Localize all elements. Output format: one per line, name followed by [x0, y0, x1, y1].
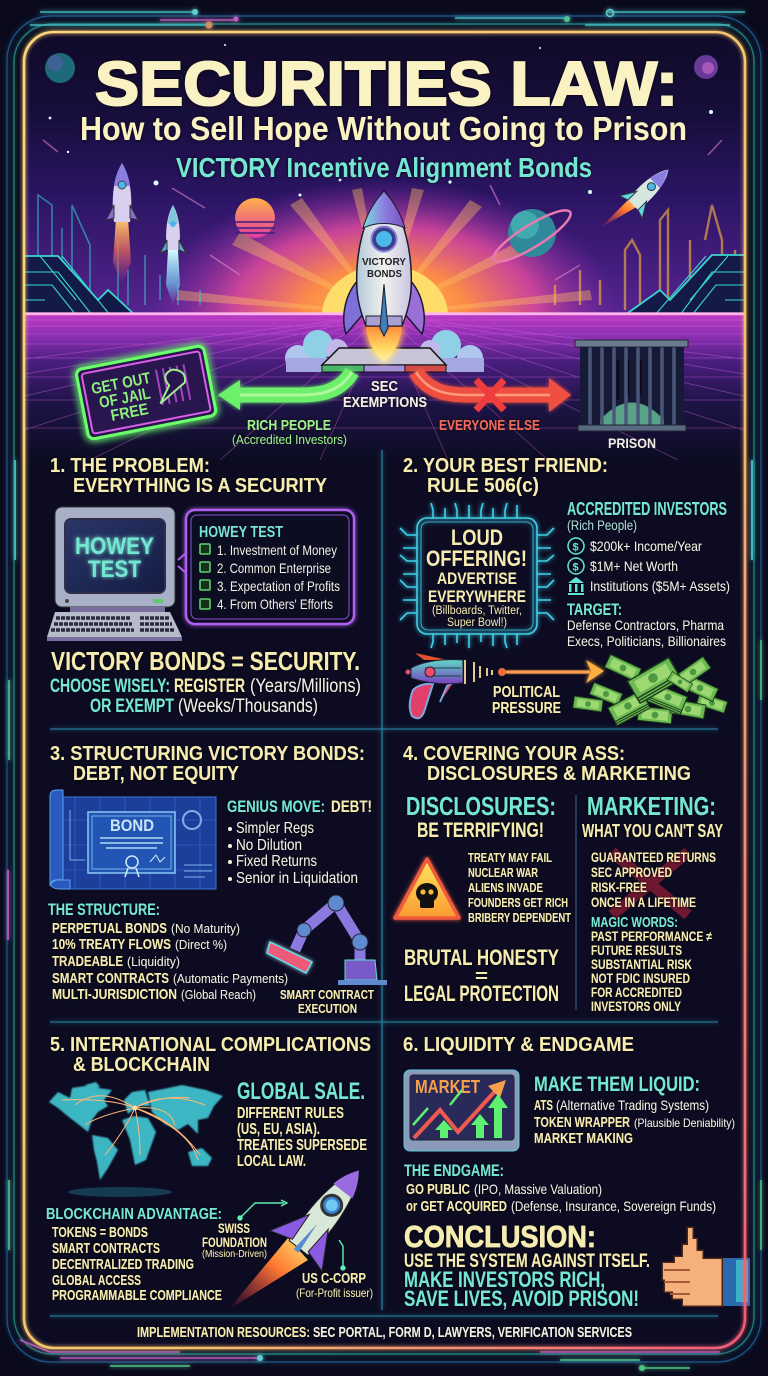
can't say list: SEC APPROVED [591, 865, 672, 880]
disclosure risks: FOUNDERS GET RICH [468, 895, 568, 910]
label: everyone else: EVERYONE ELSE [439, 417, 540, 434]
horizon line [24, 312, 745, 315]
panel 6: liquidity and endgame [403, 1034, 750, 1311]
disclosure risks: NUCLEAR WAR [468, 865, 538, 880]
brutal honesty: BRUTAL HONESTY [404, 945, 559, 970]
hero scene [0, 32, 768, 460]
brutal honesty: = [475, 966, 488, 986]
icon: dollar coin 2: $ [572, 562, 579, 574]
make them liquid: MAKE THEM LIQUID: [534, 1073, 700, 1096]
ticket: get out of jail free [76, 345, 217, 440]
world map [49, 1082, 223, 1197]
genius move list: GENIUS MOVE: [227, 797, 325, 816]
connector arrows [238, 1200, 345, 1270]
conclusion: MAKE INVESTORS RICH, [404, 1267, 605, 1292]
howey test checklist: 3. Expectation of Profits [217, 578, 340, 594]
blueprint bond: BOND [110, 816, 154, 835]
icon: red x [612, 852, 688, 915]
prison [575, 340, 688, 451]
heading 6: 6. LIQUIDITY & ENDGAME [403, 1034, 634, 1056]
chip: loud offering: LOUD [451, 525, 503, 550]
us c-corp: (For-Profit issuer) [296, 1286, 373, 1300]
ticket: get out of jail free: OF JAIL [98, 385, 152, 412]
blueprint bond [50, 790, 216, 889]
disclosures heading: DISCLOSURES: [406, 791, 556, 821]
heading 3: DEBT, NOT EQUITY [73, 763, 240, 785]
howey test checklist: 2. Common Enterprise [217, 560, 331, 576]
heading 2 [403, 455, 608, 497]
city right [555, 205, 735, 310]
label: political pressure: PRESSURE [492, 700, 561, 717]
city left [38, 195, 200, 305]
brutal honesty: LEGAL PROTECTION [404, 981, 559, 1006]
global sale text: TREATIES SUPERSEDE [237, 1137, 367, 1154]
icon: bank [568, 577, 584, 595]
howey test checklist: HOWEY TEST [199, 524, 283, 541]
the structure list: THE STRUCTURE: [48, 900, 160, 919]
icon: crt computer: HOWEY [75, 533, 154, 560]
magic words: FOR ACCREDITED [591, 985, 682, 1000]
verdict text: (Years/Millions) [250, 676, 361, 697]
disclosure risks: ALIENS INVADE [468, 880, 543, 895]
clouds [285, 330, 484, 372]
icon: dollar coin 2 [568, 558, 584, 574]
market monitor [404, 1070, 519, 1151]
make them liquid: (Alternative Trading Systems) [556, 1097, 709, 1113]
big sun [322, 270, 448, 312]
heading 1: EVERYTHING IS A SECURITY [73, 475, 328, 497]
panel 1: the problem [47, 455, 361, 717]
accredited investors: $1M+ Net Worth [590, 558, 678, 574]
the endgame: (Defense, Insurance, Sovereign Funds) [511, 1198, 716, 1214]
icon: crt computer: TEST [88, 556, 141, 583]
accredited investors: Defense Contractors, Pharma [567, 617, 724, 633]
subtitle: How to Sell Hope Without Going to Prison [80, 110, 687, 147]
red x [476, 380, 504, 410]
launch platform [322, 348, 446, 372]
accredited investors: (Rich People) [567, 517, 637, 533]
chip: loud offering: (Billboards, Twitter, [432, 605, 522, 617]
magic words [591, 914, 712, 1014]
sunburst glow [162, 183, 608, 312]
panel 2: rule 506(c) [400, 455, 730, 725]
label: political pressure: POLITICAL [493, 684, 560, 701]
chip: loud offering [400, 503, 554, 648]
blockchain advantage list: PROGRAMMABLE COMPLIANCE [52, 1287, 222, 1304]
magic words: PAST PERFORMANCE ≠ [591, 929, 712, 944]
red arrow [416, 372, 571, 412]
main rocket: VICTORY [362, 256, 406, 268]
pixel planet left [45, 53, 75, 83]
the endgame [404, 1161, 716, 1215]
accredited investors: $200k+ Income/Year [590, 538, 702, 554]
swiss foundation: SWISS [218, 1220, 250, 1236]
label: sec exemptions: SEC [371, 379, 398, 395]
howey test checklist [178, 510, 354, 624]
the structure list: PERPETUAL BONDS [52, 920, 167, 937]
blockchain advantage list: GLOBAL ACCESS [52, 1272, 141, 1289]
the structure list: TRADEABLE [52, 953, 123, 970]
blockchain advantage list: DECENTRALIZED TRADING [52, 1256, 194, 1273]
prison: PRISON [608, 435, 656, 451]
magic words: SUBSTANTIAL RISK [591, 957, 692, 972]
the structure list: SMART CONTRACTS [52, 970, 169, 987]
panel 5: international and blockchain [46, 1034, 385, 1310]
icon: robot arm [267, 895, 387, 985]
verdict text: (Weeks/Thousands) [178, 696, 318, 717]
the endgame: or GET ACQUIRED [406, 1199, 507, 1215]
streaks [43, 140, 722, 280]
global sale text: DIFFERENT RULES [237, 1105, 344, 1122]
make them liquid [534, 1073, 735, 1147]
main rocket [344, 191, 424, 362]
ticket: get out of jail free: GET OUT [90, 370, 152, 398]
mountains left [24, 256, 135, 315]
green arrow [218, 372, 352, 410]
howey test checklist: 4. From Others' Efforts [217, 596, 333, 612]
icon: dollar coin [568, 538, 584, 554]
make them liquid: (Plausible Deniability) [634, 1116, 735, 1130]
disclosures heading: BE TERRIFYING! [417, 819, 544, 842]
verdict text: CHOOSE WISELY: [50, 676, 170, 697]
icon: pile of money [573, 654, 728, 725]
heading 5: 5. INTERNATIONAL COMPLICATIONS [50, 1034, 371, 1056]
heading 3: 3. STRUCTURING VICTORY BONDS: [50, 743, 365, 765]
chip: loud offering: OFFERING! [426, 546, 527, 571]
conclusion: USE THE SYSTEM AGAINST ITSELF. [404, 1251, 650, 1272]
magic words: MAGIC WORDS: [591, 914, 678, 931]
disclosure risks: BRIBERY DEPENDENT [468, 910, 571, 925]
verdict text: VICTORY BONDS = SECURITY. [51, 646, 360, 676]
small rocket B [160, 205, 186, 305]
stars [49, 44, 713, 196]
marketing heading: MARKETING: [587, 791, 716, 821]
retro sun [235, 198, 275, 238]
icon: pixel thumbs up [662, 1227, 750, 1306]
genius move list: DEBT! [331, 797, 372, 816]
label: sec exemptions [343, 379, 427, 411]
swiss foundation: (Mission-Driven) [202, 1249, 267, 1260]
howey test checklist: 1. Investment of Money [217, 542, 337, 558]
chip: loud offering: ADVERTISE [437, 569, 517, 588]
panel 3: structuring victory bonds [48, 743, 387, 1016]
the endgame: GO PUBLIC [406, 1182, 470, 1198]
make them liquid: ATS [534, 1097, 553, 1114]
label: smart contract execution: EXECUTION [298, 1001, 357, 1016]
accredited investors: Institutions ($5M+ Assets) [590, 578, 730, 594]
conclusion [404, 1219, 650, 1311]
magic words: FUTURE RESULTS [591, 943, 682, 958]
the endgame: THE ENDGAME: [404, 1161, 504, 1180]
can't say list: ONCE IN A LIFETIME [591, 895, 696, 910]
chip: loud offering: Super Bowl!) [447, 617, 507, 629]
icon: warning skull [395, 859, 459, 918]
label: sec exemptions: EXEMPTIONS [343, 395, 427, 411]
heading 1: 1. THE PROBLEM: [50, 455, 210, 477]
accredited investors: Execs, Politicians, Billionaires [567, 633, 726, 649]
the structure list: (Direct %) [175, 937, 227, 952]
heading 5: & BLOCKCHAIN [73, 1054, 210, 1076]
can't say list [591, 850, 716, 910]
global sale text [237, 1078, 367, 1170]
heading 4: 4. COVERING YOUR ASS: [403, 743, 625, 765]
genius move list [227, 797, 372, 887]
blockchain advantage list: BLOCKCHAIN ADVANTAGE: [46, 1206, 222, 1223]
verdict text: REGISTER [174, 676, 245, 697]
genius move list: No Dilution [236, 837, 302, 854]
market monitor: MARKET [415, 1077, 480, 1097]
panel 4: covering your ass [395, 743, 723, 1014]
genius move list: Fixed Returns [236, 853, 317, 870]
verdict text: OR EXEMPT [90, 696, 174, 717]
ringed planet [492, 209, 572, 263]
global sale text: GLOBAL SALE. [237, 1078, 365, 1105]
disclosures heading [406, 791, 556, 842]
the structure list: (No Maturity) [171, 921, 240, 936]
grid floor [0, 315, 768, 460]
magic words: INVESTORS ONLY [591, 999, 681, 1014]
footer resources: SEC PORTAL, FORM D, LAWYERS, VERIFICATION SERVICES [313, 1324, 632, 1341]
global sale text: (US, EU, ASIA). [237, 1121, 320, 1138]
footer resources [137, 1324, 632, 1341]
conclusion: CONCLUSION: [404, 1219, 596, 1254]
tilted rocket [602, 170, 668, 227]
magic words: NOT FDIC INSURED [591, 971, 690, 986]
can't say list: GUARANTEED RETURNS [591, 850, 716, 865]
disclosure risks [468, 850, 571, 925]
can't say list: RISK-FREE [591, 880, 647, 895]
the structure list [48, 900, 288, 1003]
icon: dollar coin: $ [572, 542, 579, 554]
blockchain advantage list: SMART CONTRACTS [52, 1240, 160, 1257]
main rocket: BONDS [367, 268, 402, 280]
tagline: VICTORY Incentive Alignment Bonds [176, 152, 592, 183]
heading 2: 2. YOUR BEST FRIEND: [403, 455, 608, 477]
icon: crt computer [47, 507, 182, 641]
mountains right [625, 255, 745, 315]
label: smart contract execution: SMART CONTRACT [280, 987, 374, 1002]
title [80, 50, 687, 183]
footer resources: IMPLEMENTATION RESOURCES: [137, 1324, 310, 1341]
us c-corp: US C-CORP [302, 1270, 366, 1287]
accredited investors [567, 499, 730, 649]
marketing heading [582, 791, 723, 841]
the structure list: (Automatic Payments) [173, 971, 288, 986]
small rocket A [106, 163, 138, 285]
pixel planet right [694, 55, 718, 79]
blockchain advantage list [46, 1206, 222, 1304]
label: smart contract execution [280, 987, 374, 1016]
rays [176, 188, 592, 314]
the endgame: (IPO, Massive Valuation) [474, 1181, 602, 1197]
the structure list: MULTI-JURISDICTION [52, 986, 177, 1003]
swiss foundation: FOUNDATION [202, 1234, 267, 1250]
us c-corp [296, 1270, 373, 1300]
conclusion: SAVE LIVES, AVOID PRISON! [404, 1286, 639, 1311]
heading 2: RULE 506(c) [427, 475, 539, 497]
genius move list: Senior in Liquidation [236, 870, 358, 887]
accredited investors: TARGET: [567, 600, 622, 619]
verdict text [50, 646, 361, 717]
blockchain advantage list: TOKENS = BONDS [52, 1224, 148, 1241]
label: political pressure [492, 684, 561, 717]
heading 4 [403, 743, 691, 785]
label: rich people [232, 417, 347, 447]
genius move list: Simpler Regs [236, 820, 314, 837]
ticket: get out of jail free: FREE [109, 401, 150, 425]
the structure list: (Liquidity) [127, 954, 180, 969]
brutal honesty [404, 945, 559, 1006]
the structure list: 10% TREATY FLOWS [52, 936, 171, 953]
title: SECURITIES LAW: [95, 50, 678, 119]
section dividers [50, 450, 718, 1316]
heading 3 [50, 743, 365, 785]
label: rich people: (Accredited Investors) [232, 432, 347, 447]
disclosure risks: TREATY MAY FAIL [468, 850, 552, 865]
rocket with trail [228, 1150, 385, 1310]
the structure list: (Global Reach) [181, 987, 256, 1002]
chip: loud offering: EVERYWHERE [428, 587, 526, 606]
heading 5 [50, 1034, 371, 1076]
sky [24, 32, 745, 315]
swiss foundation [202, 1220, 267, 1260]
make them liquid: TOKEN WRAPPER [534, 1114, 630, 1131]
label: rich people: RICH PEOPLE [247, 417, 331, 434]
make them liquid: MARKET MAKING [534, 1130, 633, 1147]
heading 1 [50, 455, 328, 497]
icon: ray gun [406, 653, 604, 718]
heading 4: DISCLOSURES & MARKETING [427, 763, 691, 785]
global sale text: LOCAL LAW. [237, 1153, 306, 1170]
